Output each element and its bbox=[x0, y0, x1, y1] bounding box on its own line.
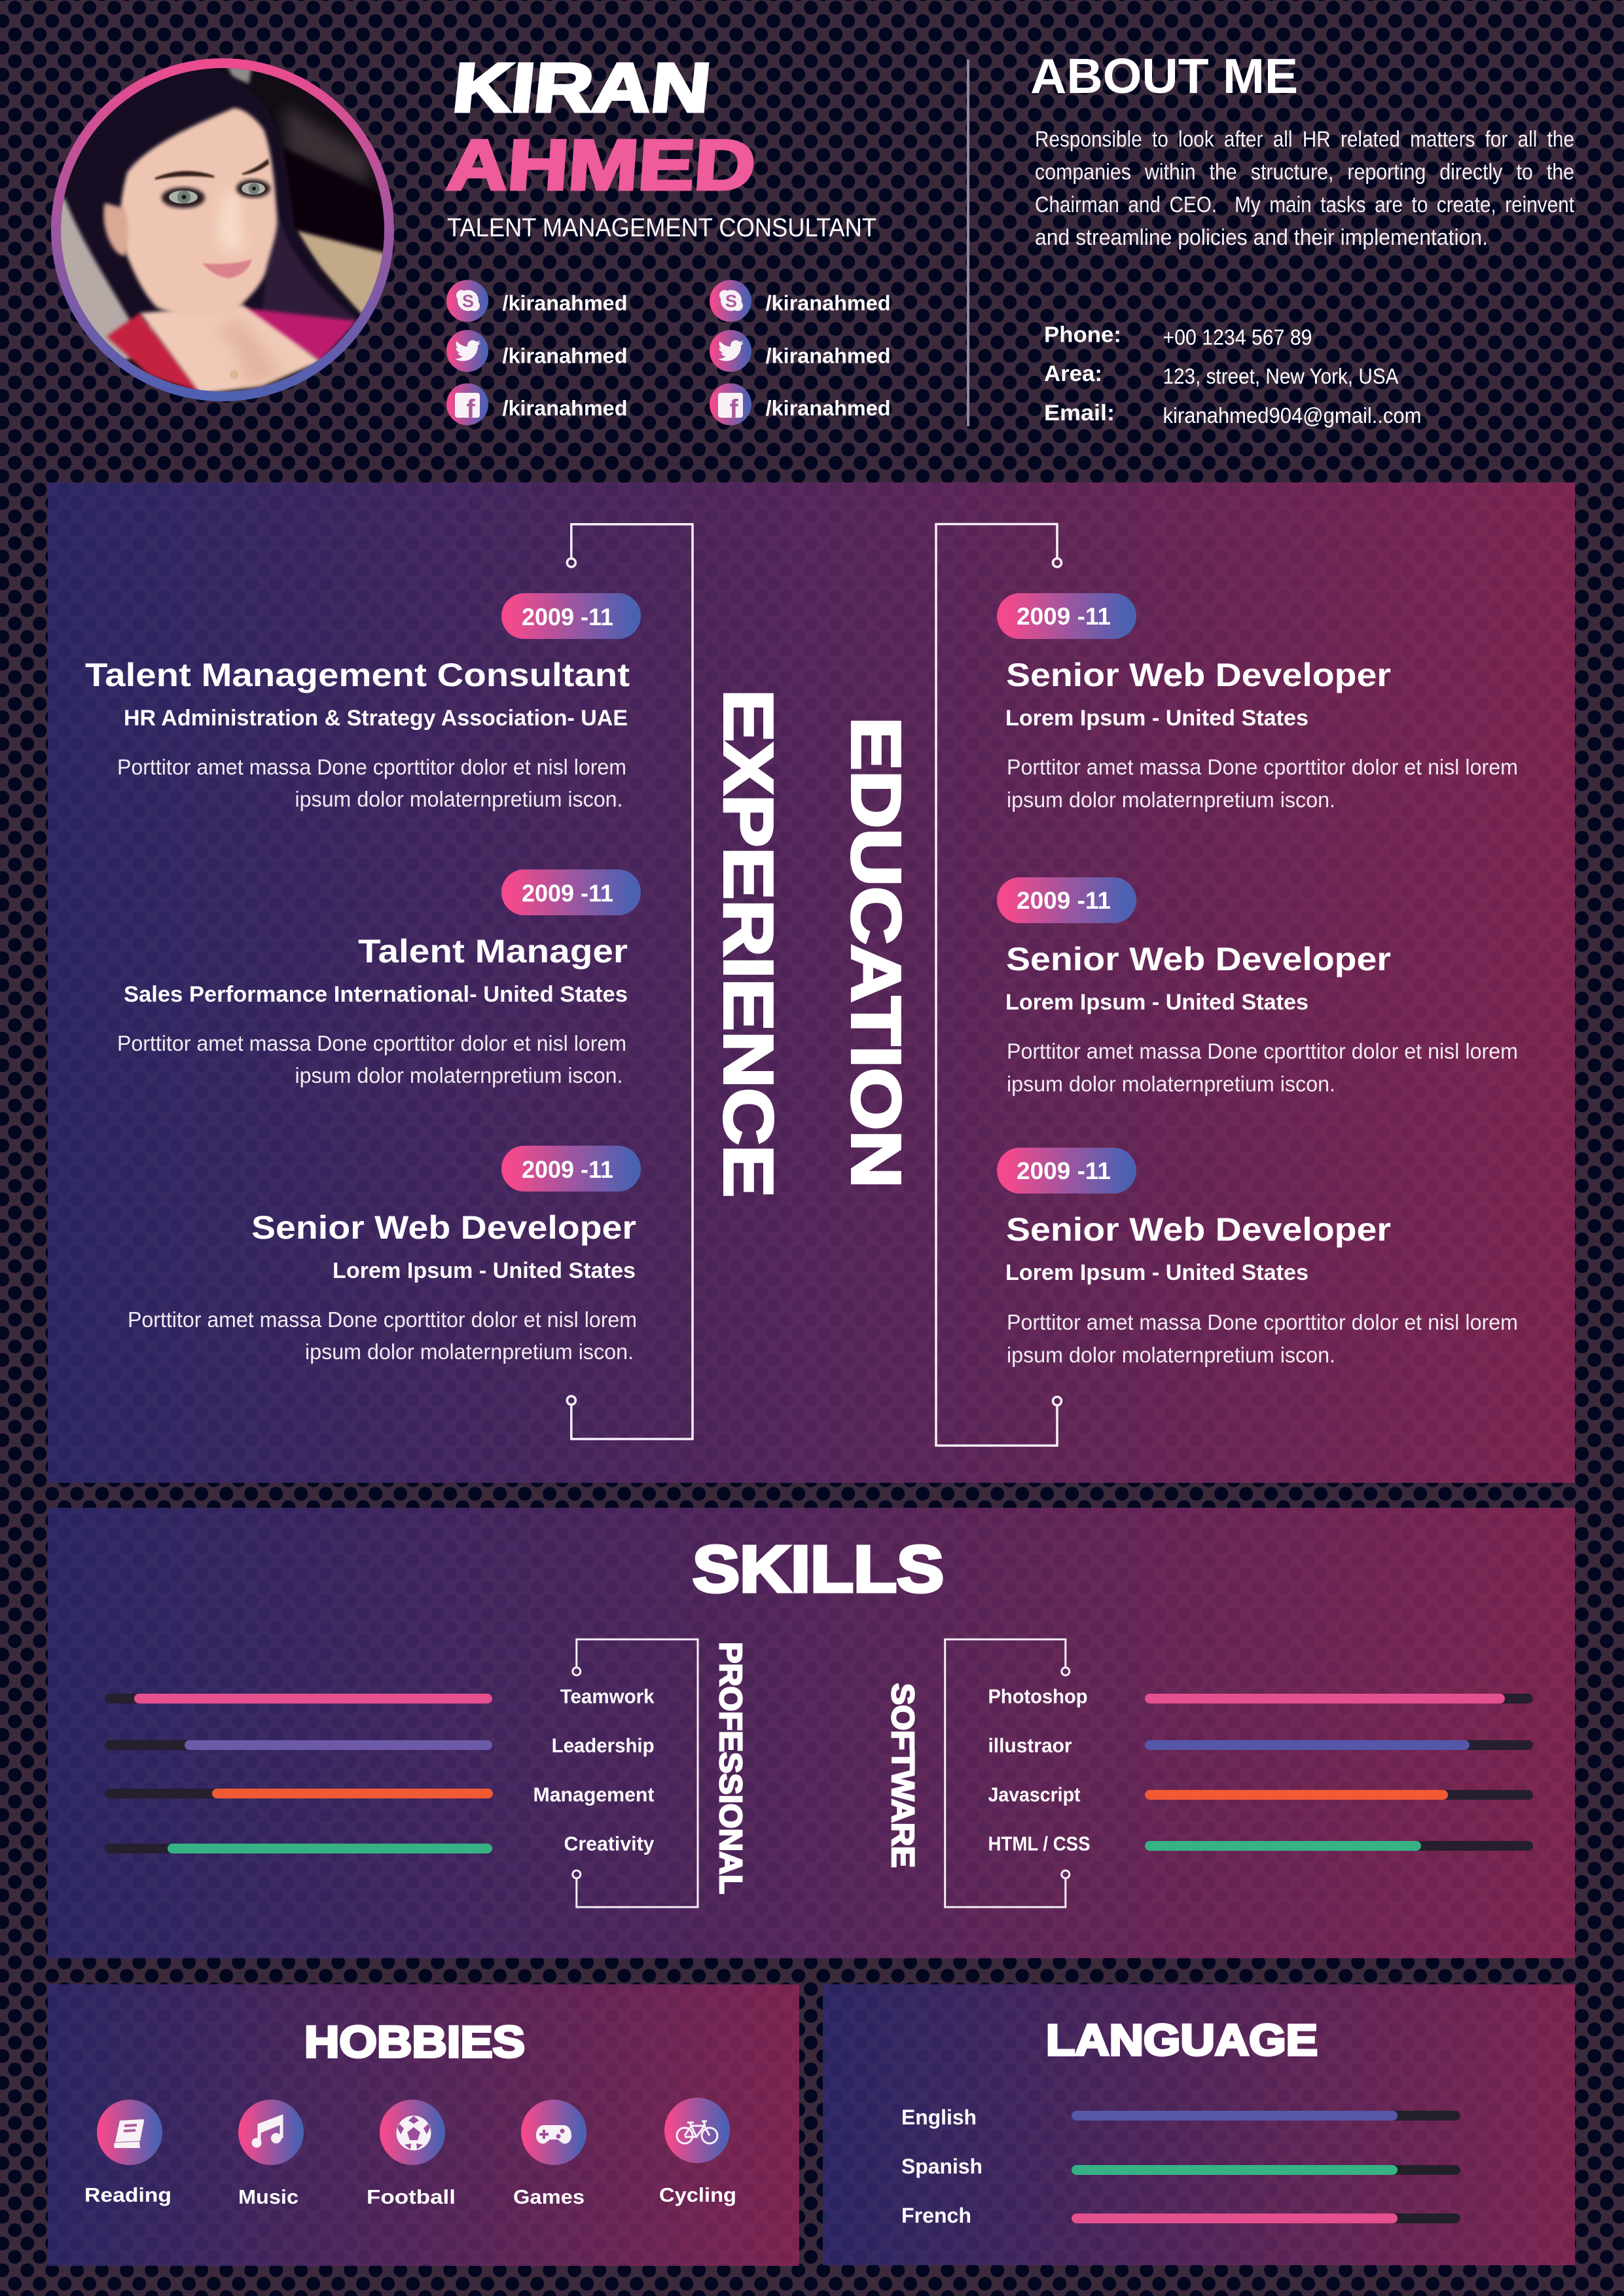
professional skill labels: Teamwork bbox=[560, 1685, 655, 1708]
professional skill labels: Creativity bbox=[564, 1832, 655, 1855]
bracket: education bbox=[936, 524, 1062, 1446]
heading: hobbies: HOBBIES bbox=[304, 2017, 525, 2067]
profile photo bbox=[51, 58, 394, 402]
date pill: 2009 -11 bbox=[522, 1156, 613, 1183]
date pill: 2009 -11 bbox=[522, 604, 613, 630]
name bbox=[444, 50, 758, 204]
experience entry 2: ipsum dolor molaternpretium iscon. bbox=[295, 1063, 623, 1087]
label: football: Football bbox=[367, 2185, 456, 2208]
heading: professional: PROFESSIONAL bbox=[713, 1642, 748, 1894]
icon: games bbox=[521, 2100, 586, 2165]
date pill bbox=[997, 877, 1136, 923]
social handle: /kiranahmed bbox=[503, 344, 627, 368]
date pill bbox=[997, 1148, 1136, 1194]
education entry 2: Senior Web Developer bbox=[1006, 941, 1391, 977]
social handle: /kiranahmed bbox=[503, 291, 627, 315]
icon: skype bbox=[710, 280, 751, 322]
experience entry 1: HR Administration & Strategy Association- UAE bbox=[124, 706, 628, 731]
professional skill labels: Management bbox=[533, 1783, 655, 1806]
icon: facebook bbox=[710, 384, 751, 426]
contact details: kiranahmed904@gmail..com bbox=[1163, 403, 1422, 428]
contact details: Email: bbox=[1044, 401, 1115, 426]
panel: experience and education bbox=[48, 483, 1575, 1483]
experience entry 2: Sales Performance International- United States bbox=[124, 982, 628, 1007]
icon: skype: S bbox=[725, 291, 737, 311]
about me text bbox=[1035, 127, 1574, 250]
panel: skills bbox=[48, 1508, 1575, 1958]
date pill bbox=[501, 593, 641, 639]
date pill: 2009 -11 bbox=[1017, 603, 1111, 630]
panel: hobbies bbox=[48, 1984, 799, 2266]
contact details: 123, street, New York, USA bbox=[1163, 364, 1398, 388]
education entry 1: ipsum dolor molaternpretium iscon. bbox=[1007, 788, 1335, 812]
software skill labels: HTML / CSS bbox=[988, 1832, 1091, 1855]
icon: twitter bbox=[446, 330, 488, 372]
date pill bbox=[501, 869, 641, 915]
professional skill labels bbox=[533, 1685, 655, 1855]
label: music: Music bbox=[238, 2185, 298, 2208]
social links: column 2 bbox=[710, 280, 891, 426]
education entry 3: Lorem Ipsum - United States bbox=[1005, 1260, 1308, 1285]
heading: experience: EXPERIENCE bbox=[710, 689, 787, 1197]
experience entry 1 bbox=[85, 593, 641, 811]
label: cycling: Cycling bbox=[659, 2183, 736, 2206]
label: games: Games bbox=[513, 2185, 585, 2208]
bracket: experience bbox=[567, 524, 693, 1439]
contact details bbox=[1044, 323, 1422, 428]
date pill: 2009 -11 bbox=[522, 880, 613, 907]
icon: twitter bbox=[710, 330, 751, 372]
language labels: English bbox=[901, 2105, 977, 2129]
education entry 3 bbox=[997, 1148, 1518, 1367]
date pill: 2009 -11 bbox=[1017, 1157, 1111, 1184]
social handle: /kiranahmed bbox=[766, 291, 891, 315]
education entry 2: ipsum dolor molaternpretium iscon. bbox=[1007, 1072, 1335, 1096]
contact details: Area: bbox=[1044, 361, 1102, 386]
language labels bbox=[901, 2105, 983, 2227]
panel: language bbox=[823, 1984, 1575, 2265]
experience entry 2 bbox=[117, 869, 641, 1087]
bracket: professional bbox=[573, 1639, 698, 1907]
education entry 2: Porttitor amet massa Done cporttitor dolor et nisl lorem bbox=[1007, 1039, 1518, 1063]
heading: skills: SKILLS bbox=[693, 1533, 944, 1606]
experience entry 3: Porttitor amet massa Done cporttitor dolor et nisl lorem bbox=[128, 1307, 637, 1332]
experience entry 2: Porttitor amet massa Done cporttitor dolor et nisl lorem bbox=[117, 1031, 626, 1055]
social handle: /kiranahmed bbox=[766, 397, 891, 420]
language labels: French bbox=[901, 2204, 971, 2227]
experience entry 1: ipsum dolor molaternpretium iscon. bbox=[295, 787, 623, 811]
social links: column 1 bbox=[446, 280, 627, 426]
experience entry 3: Lorem Ipsum - United States bbox=[333, 1258, 636, 1283]
education entry 1: Porttitor amet massa Done cporttitor dolor et nisl lorem bbox=[1007, 755, 1518, 779]
about me text: and streamline policies and their implementation. bbox=[1035, 225, 1488, 250]
education entry 2: Lorem Ipsum - United States bbox=[1005, 990, 1308, 1015]
bar chart: professional skills bbox=[105, 1694, 493, 1853]
education entry 3: Senior Web Developer bbox=[1006, 1211, 1391, 1248]
icon: facebook: f bbox=[729, 395, 738, 424]
heading: education: EDUCATION bbox=[837, 717, 914, 1188]
icon: reading bbox=[97, 2100, 162, 2165]
software skill labels: Javascript bbox=[988, 1783, 1080, 1806]
education entry 1: Lorem Ipsum - United States bbox=[1005, 706, 1308, 731]
heading: language: LANGUAGE bbox=[1046, 2016, 1318, 2065]
education entry 1: Senior Web Developer bbox=[1006, 657, 1391, 693]
bar chart: software skills bbox=[1145, 1694, 1533, 1851]
professional skill labels: Leadership bbox=[552, 1734, 655, 1757]
icon: facebook: f bbox=[466, 395, 475, 424]
icon: football bbox=[380, 2100, 445, 2165]
education entry 3: ipsum dolor molaternpretium iscon. bbox=[1007, 1343, 1335, 1367]
software skill labels: illustraor bbox=[988, 1734, 1072, 1757]
about me text: companies within the structure, reporting directly to the bbox=[1035, 160, 1574, 185]
experience entry 1: Talent Management Consultant bbox=[85, 657, 630, 693]
experience entry 3 bbox=[128, 1146, 641, 1364]
social handle: /kiranahmed bbox=[503, 397, 627, 420]
bracket: software bbox=[945, 1639, 1070, 1907]
date pill bbox=[997, 593, 1136, 639]
date pill bbox=[501, 1146, 641, 1192]
experience entry 3: ipsum dolor molaternpretium iscon. bbox=[305, 1339, 634, 1364]
icon: skype bbox=[446, 280, 488, 322]
education entry 3: Porttitor amet massa Done cporttitor dolor et nisl lorem bbox=[1007, 1310, 1518, 1334]
education entry 2 bbox=[997, 877, 1518, 1096]
date pill: 2009 -11 bbox=[1017, 887, 1111, 914]
heading: software: SOFTWARE bbox=[885, 1683, 920, 1868]
software skill labels bbox=[988, 1685, 1091, 1855]
icon: music bbox=[238, 2100, 304, 2165]
first name: KIRAN bbox=[450, 50, 714, 126]
experience entry 2: Talent Manager bbox=[358, 933, 628, 970]
bar chart: languages bbox=[1072, 2111, 1460, 2223]
education entry 1 bbox=[997, 593, 1518, 812]
language labels: Spanish bbox=[901, 2155, 983, 2178]
icon: cycling bbox=[664, 2098, 730, 2163]
experience entry 1: Porttitor amet massa Done cporttitor dolor et nisl lorem bbox=[117, 755, 626, 779]
last name: AHMED bbox=[444, 125, 758, 204]
social handle: /kiranahmed bbox=[766, 344, 891, 368]
heading: about me: ABOUT ME bbox=[1030, 48, 1298, 103]
experience entry 3: Senior Web Developer bbox=[251, 1209, 636, 1246]
label: reading: Reading bbox=[84, 2183, 171, 2206]
job title: TALENT MANAGEMENT CONSULTANT bbox=[447, 213, 876, 242]
software skill labels: Photoshop bbox=[988, 1685, 1088, 1708]
icon: skype: S bbox=[462, 291, 474, 311]
icon: facebook bbox=[446, 384, 488, 426]
contact details: Phone: bbox=[1044, 323, 1121, 348]
contact details: +00 1234 567 89 bbox=[1163, 325, 1312, 350]
